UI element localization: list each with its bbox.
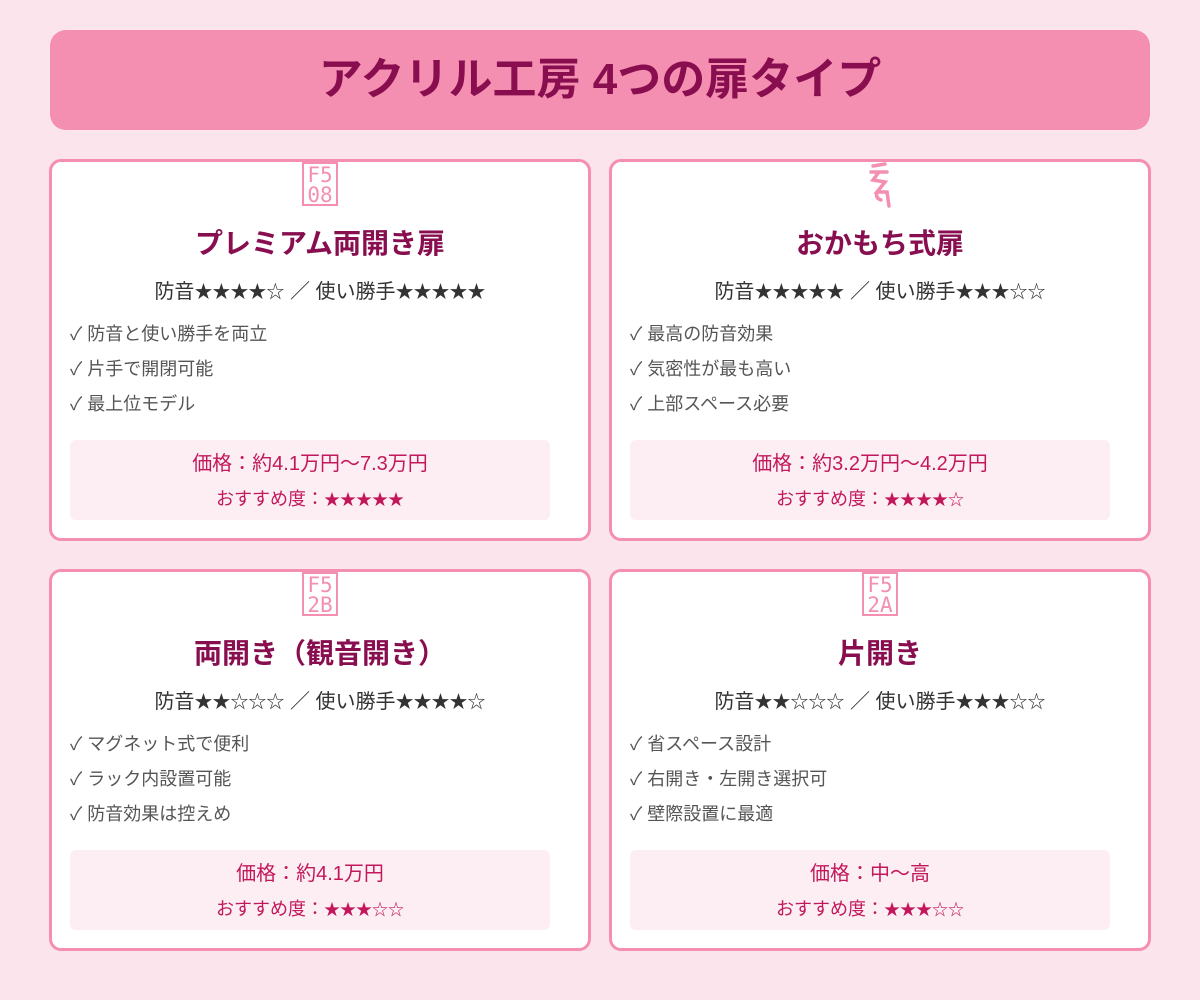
- price box: [630, 440, 1110, 520]
- features: ✓ 省スペース設計: [630, 734, 771, 754]
- icon: missing glyph F52B: [302, 572, 338, 616]
- price box: おすすめ度：★★★★☆: [776, 489, 964, 509]
- features: ✓ 防音と使い勝手を両立: [70, 324, 267, 344]
- heading: プレミアム両開き扉: [195, 228, 445, 259]
- features: ✓ 最上位モデル: [70, 394, 195, 414]
- ratings: 防音★★☆☆☆ ／ 使い勝手★★★★☆: [154, 691, 486, 713]
- features: [630, 734, 827, 824]
- price box: おすすめ度：★★★☆☆: [216, 899, 404, 919]
- heading: 両開き（観音開き）: [194, 638, 446, 669]
- features: [630, 324, 791, 414]
- heading: おかもち式扉: [796, 228, 964, 259]
- icon: missing glyph F508: F5: [307, 163, 333, 187]
- features: ✓ 上部スペース必要: [630, 394, 789, 414]
- panel: single: [609, 569, 1151, 951]
- icon: missing glyph F52A: [862, 572, 898, 616]
- features: ✓ ラック内設置可能: [70, 769, 231, 789]
- price box: 価格：約4.1万円: [236, 863, 384, 885]
- panel: kannon: [49, 569, 591, 951]
- price box: [630, 850, 1110, 930]
- price box: おすすめ度：★★★☆☆: [776, 899, 964, 919]
- price box: [70, 850, 550, 930]
- heading: 片開き: [838, 638, 922, 669]
- ratings: 防音★★☆☆☆ ／ 使い勝手★★★☆☆: [714, 691, 1046, 713]
- features: [70, 324, 267, 414]
- features: [70, 734, 249, 824]
- icon: missing glyph F52B: F5: [307, 573, 333, 597]
- features: ✓ 片手で開閉可能: [70, 359, 213, 379]
- panel: okamochi: [609, 159, 1151, 541]
- icon: missing glyph F508: [302, 162, 338, 206]
- price box: おすすめ度：★★★★★: [216, 489, 404, 509]
- ratings: 防音★★★★★ ／ 使い勝手★★★☆☆: [714, 281, 1046, 303]
- price box: 価格：約4.1万円～7.3万円: [192, 453, 428, 475]
- ratings: 防音★★★★☆ ／ 使い勝手★★★★★: [154, 281, 486, 303]
- features: ✓ 防音効果は控えめ: [70, 804, 231, 824]
- features: ✓ 壁際設置に最適: [630, 804, 773, 824]
- features: ✓ 気密性が最も高い: [630, 359, 791, 379]
- icon: missing glyph F52A: F5: [867, 573, 893, 597]
- price box: [70, 440, 550, 520]
- price box: 価格：約3.2万円～4.2万円: [752, 453, 988, 475]
- panel: premium: [49, 159, 591, 541]
- price box: 価格：中～高: [810, 863, 930, 885]
- features: ✓ マグネット式で便利: [70, 734, 249, 754]
- title: [50, 30, 1150, 130]
- features: ✓ 最高の防音効果: [630, 324, 773, 344]
- icon: glyph: [869, 162, 891, 208]
- features: ✓ 右開き・左開き選択可: [630, 769, 827, 789]
- title: アクリル工房 4つの扉タイプ: [319, 55, 881, 104]
